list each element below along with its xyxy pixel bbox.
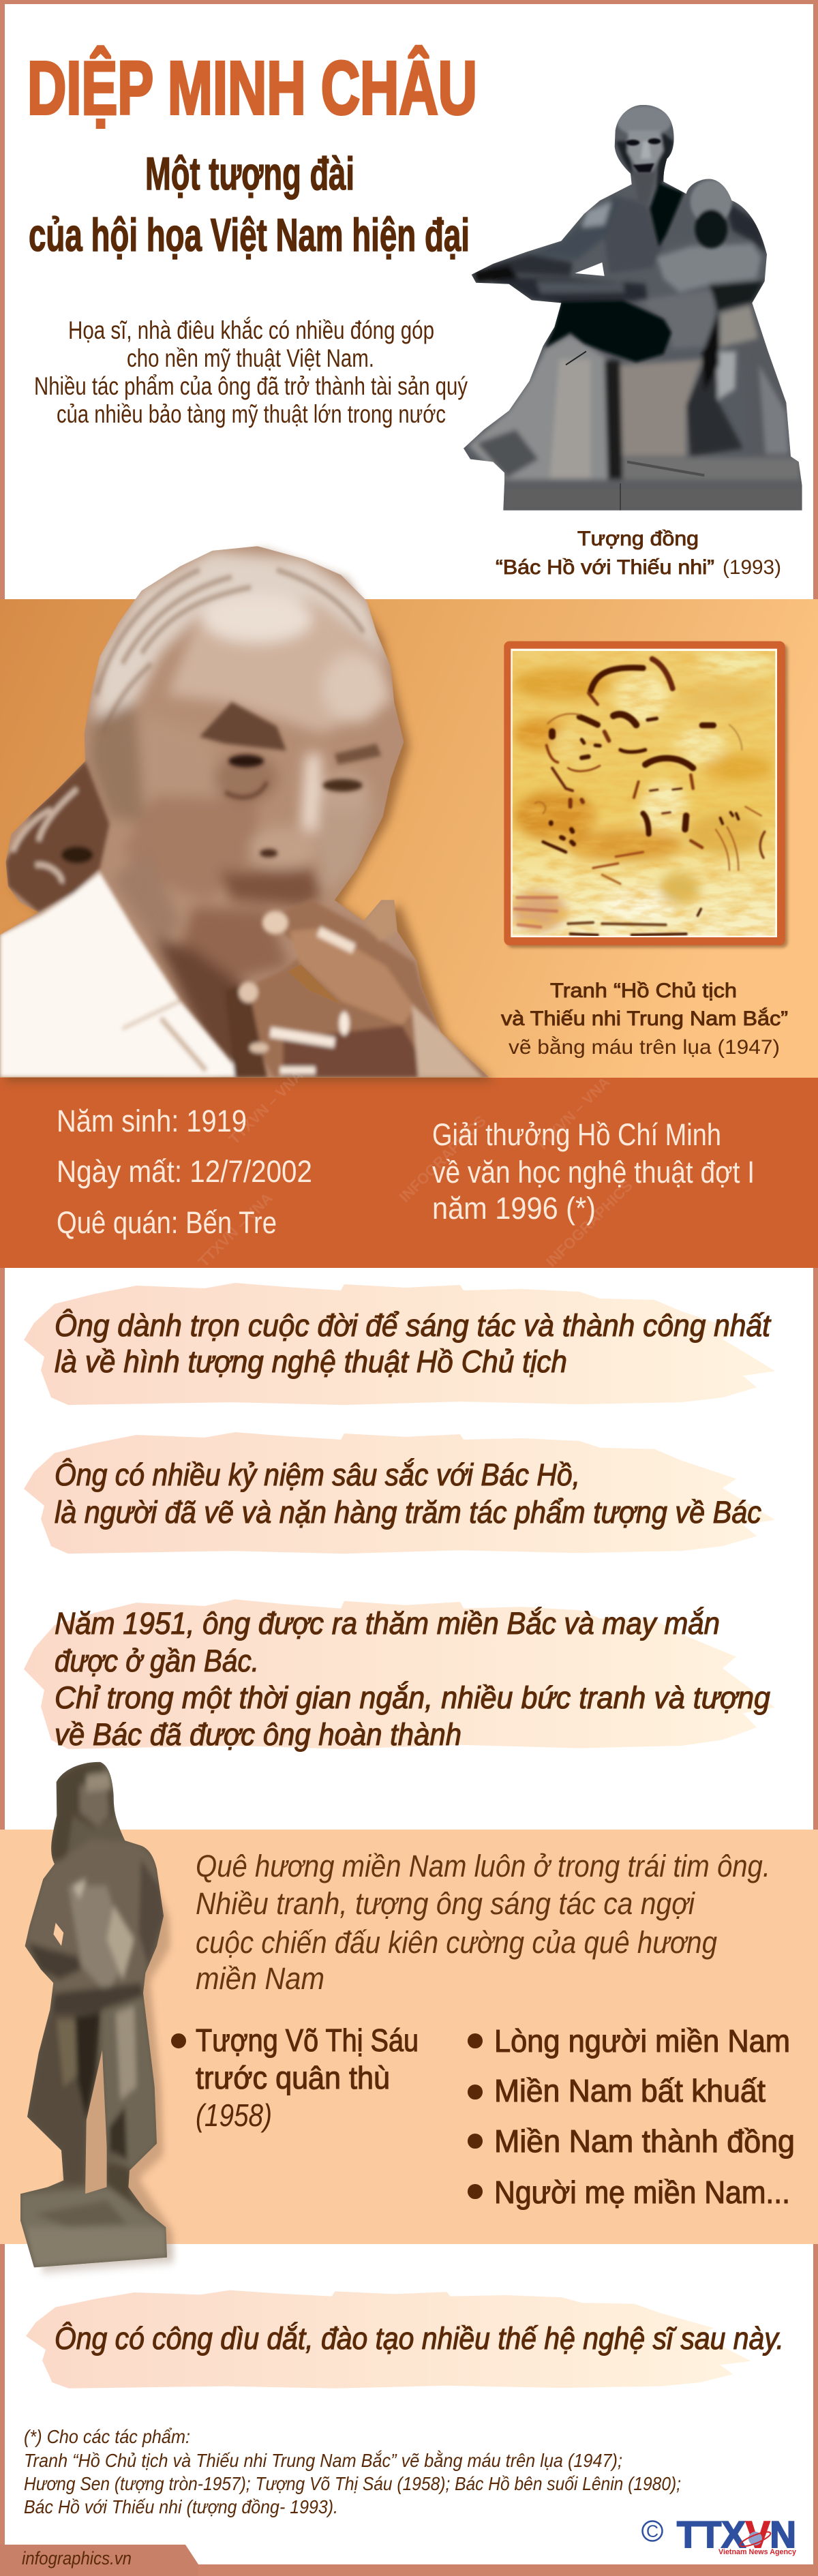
watermarks: INFOGRAPHICS	[396, 1112, 489, 1206]
intro text block: Họa sĩ, nhà điêu khắc có nhiều đóng góp	[68, 316, 434, 344]
painting surface	[511, 651, 775, 936]
award text	[432, 1117, 755, 1226]
bullet list: works: Lòng người miền Nam	[494, 2023, 790, 2059]
footnote: Tranh “Hồ Chủ tịch và Thiếu nhi Trung Nam Bắc” vẽ bằng máu trên lụa (1947);	[24, 2450, 622, 2471]
footnote	[24, 2426, 681, 2517]
panel intro text: cuộc chiến đấu kiên cường của quê hương	[196, 1925, 717, 1960]
logo: TTXVN: Vietnam News Agency	[718, 2548, 797, 2556]
brush callout 3	[24, 1599, 775, 1752]
logo: TTXVN: TTXVN	[677, 2513, 796, 2556]
intro text block	[34, 316, 468, 428]
brush callout 3: Chỉ trong một thời gian ngắn, nhiều bức tranh và tượng	[55, 1680, 770, 1715]
bullet list: works: Người mẹ miền Nam...	[494, 2175, 790, 2210]
sculpture caption: Tượng đồng	[577, 528, 699, 550]
painting caption: và Thiếu nhi Trung Nam Bắc”	[501, 1007, 788, 1030]
painting caption: vẽ bằng máu trên lụa (1947)	[509, 1036, 780, 1059]
bullet: Võ Thị Sáu statue	[172, 2022, 419, 2133]
bullet: Võ Thị Sáu statue: (1958)	[196, 2097, 272, 2133]
frame shadow	[507, 644, 788, 948]
sculpture: Võ Thị Sáu	[20, 1761, 177, 2277]
footnote: Bác Hồ với Thiếu nhi (tượng đồng- 1993).	[24, 2496, 338, 2517]
logo: TTXVN: C	[646, 2522, 658, 2541]
portrait photo	[0, 539, 504, 1084]
sculpture: Bác Hồ với Thiếu nhi	[464, 95, 811, 518]
panel: southern homeland	[0, 1830, 818, 2244]
watermarks: TTXVN – VNA	[532, 1074, 614, 1155]
brush callout 1: Ông dành trọn cuộc đời để sáng tác và thành công nhất	[55, 1308, 772, 1343]
subtitle	[29, 148, 470, 261]
bullet: Võ Thị Sáu statue: trước quân thù	[196, 2060, 390, 2095]
painting in frame	[504, 641, 788, 948]
brush callout 2: Ông có nhiều kỷ niệm sâu sắc với Bác Hồ,	[55, 1457, 580, 1492]
award text: năm 1996 (*)	[432, 1191, 596, 1226]
award text: về văn học nghệ thuật đợt I	[432, 1155, 755, 1189]
footnote: Hương Sen (tượng tròn-1957); Tượng Võ Thị Sáu (1958); Bác Hồ bên suối Lênin (1980);	[24, 2473, 681, 2494]
watermarks: TTXVN – VNA	[226, 1067, 307, 1148]
intro text block: cho nền mỹ thuật Việt Nam.	[127, 344, 374, 372]
painting frame	[504, 641, 785, 945]
intro text block: của nhiều bảo tàng mỹ thuật lớn trong nước	[57, 400, 446, 428]
watermarks: TTXVN – VNA	[195, 1189, 276, 1271]
brush callout 4	[26, 2290, 784, 2389]
brush callout 3: Năm 1951, ông được ra thăm miền Bắc và may mắn	[55, 1606, 720, 1641]
panel intro text: miền Nam	[196, 1961, 324, 1996]
panel intro text: Nhiều tranh, tượng ông sáng tác ca ngợi	[196, 1886, 696, 1921]
bullet list: works	[468, 2023, 795, 2210]
birth and death facts	[57, 1104, 312, 1240]
award text: Giải thưởng Hồ Chí Minh	[432, 1117, 721, 1152]
panel: orange portrait band	[0, 599, 818, 1078]
watermarks: INFOGRAPHICS	[543, 1177, 636, 1271]
painting caption: Tranh “Hồ Chủ tịch	[550, 980, 737, 1002]
title: DIỆP MINH CHÂU	[27, 46, 477, 130]
brush callout 2: là người đã vẽ và nặn hàng trăm tác phẩm tượng về Bác	[55, 1495, 761, 1530]
birth and death facts: Ngày mất: 12/7/2002	[57, 1154, 312, 1189]
footnote: (*) Cho các tác phẩm:	[24, 2426, 190, 2447]
sculpture caption: “Bác Hồ với Thiếu nhi”	[496, 556, 714, 579]
birth and death facts: Năm sinh: 1919	[57, 1104, 247, 1138]
brush callout 1	[24, 1283, 775, 1405]
brush callout 1: là về hình tượng nghệ thuật Hồ Chủ tịch	[55, 1344, 567, 1379]
painting caption	[501, 980, 788, 1059]
brush callout 2	[24, 1432, 775, 1554]
sculpture caption: (1993)	[723, 556, 781, 579]
bullet: Võ Thị Sáu statue: Tượng Võ Thị Sáu	[196, 2022, 419, 2058]
sculpture caption	[496, 528, 781, 579]
painting mat	[511, 649, 777, 937]
subtitle: của hội họa Việt Nam hiện đại	[29, 209, 470, 261]
brush callout 3: về Bác đã được ông hoàn thành	[55, 1717, 461, 1752]
website tab: infographics.vn	[22, 2548, 132, 2569]
bullet list: works: Miền Nam thành đồng	[494, 2123, 795, 2159]
subtitle: Một tượng đài	[145, 148, 354, 200]
intro text block: Nhiều tác phẩm của ông đã trở thành tài sản quý	[34, 372, 468, 400]
birth and death facts: Quê quán: Bến Tre	[57, 1205, 277, 1240]
panel intro text	[196, 1849, 770, 1996]
watermarks	[195, 1067, 636, 1271]
panel: rust info band	[0, 1078, 818, 1268]
brush callout 3: được ở gần Bác.	[55, 1643, 259, 1678]
website tab	[0, 2545, 198, 2576]
bullet list: works: Miền Nam bất khuất	[494, 2073, 766, 2108]
